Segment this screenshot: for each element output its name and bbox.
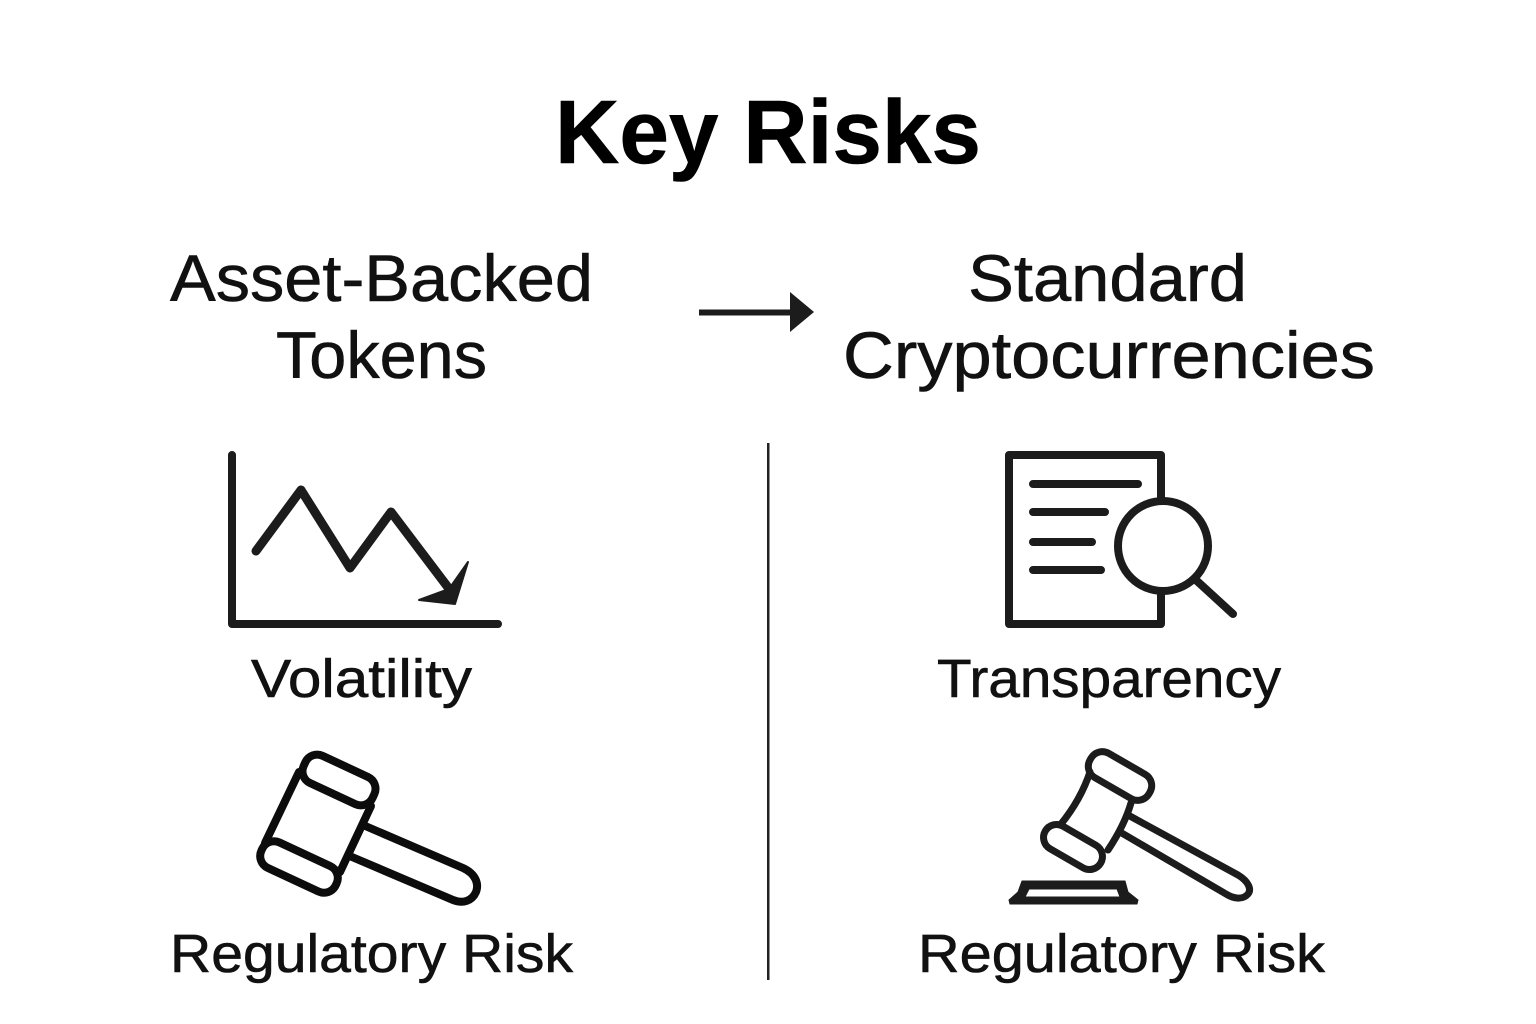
- icon: gavel with sound block: [1009, 747, 1250, 904]
- icon: document with magnifying glass: [1009, 455, 1233, 624]
- icon: gavel: [256, 750, 477, 902]
- arrow: comparison: [699, 292, 814, 332]
- heading: asset-backed tokens: Asset-Backed: [170, 241, 593, 315]
- title: Key Risks: [555, 83, 981, 183]
- center divider: [767, 443, 770, 980]
- heading: asset-backed tokens: Tokens: [276, 318, 487, 392]
- label: regulatory risk: Regulatory Risk: [170, 924, 574, 984]
- panel: standard cryptocurrencies risks: [918, 455, 1326, 984]
- icon: falling line chart: [232, 455, 498, 624]
- heading: standard cryptocurrencies: Standard: [968, 241, 1247, 315]
- label: regulatory risk: Regulatory Risk: [918, 924, 1326, 984]
- heading: standard cryptocurrencies: [843, 241, 1375, 392]
- panel: asset-backed tokens risks: [170, 455, 574, 984]
- label: transparency: Transparency: [937, 649, 1281, 709]
- label: volatility: Volatility: [251, 649, 472, 709]
- heading: standard cryptocurrencies: Cryptocurrencies: [843, 318, 1375, 392]
- heading: asset-backed tokens: [170, 241, 593, 392]
